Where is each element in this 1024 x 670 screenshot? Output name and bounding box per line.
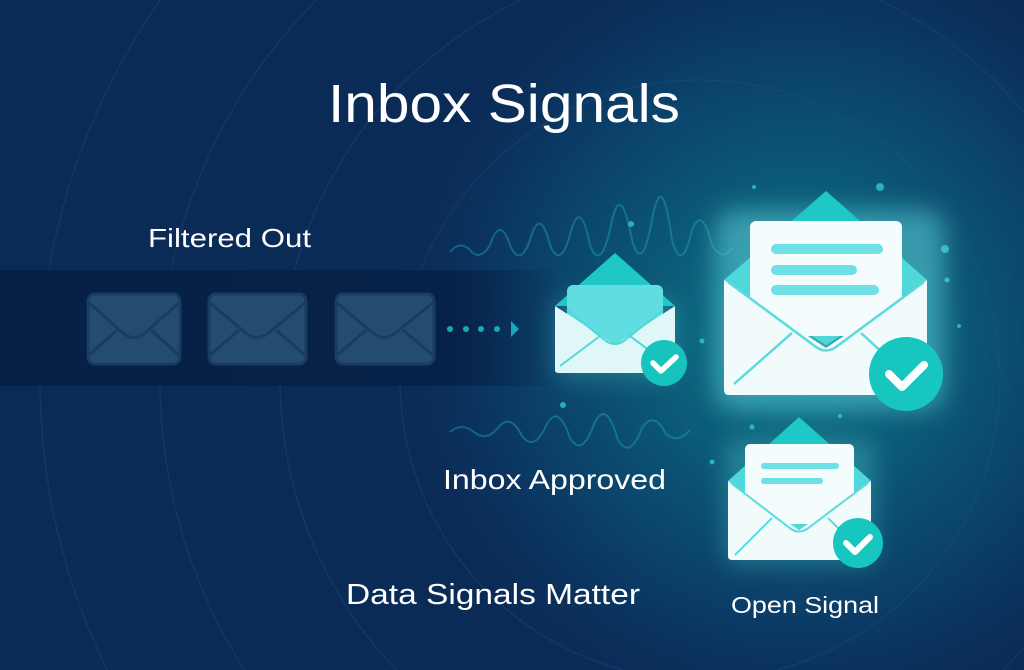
- small approved envelope: [555, 253, 687, 386]
- filtered envelopes: [88, 294, 434, 364]
- label: Filtered Out: Filtered Out: [148, 223, 312, 253]
- label: Data Signals Matter: Data Signals Matter: [346, 579, 640, 611]
- large approved envelope: [715, 191, 945, 411]
- arrow: dotted: [447, 321, 519, 337]
- waves: [450, 197, 732, 448]
- title: Inbox Signals: [328, 74, 680, 134]
- label: Inbox Approved: Inbox Approved: [443, 464, 666, 495]
- sparkle dots: [560, 183, 961, 464]
- filtered band: [0, 270, 560, 386]
- label: Open Signal: Open Signal: [731, 592, 879, 618]
- open signal envelope: [725, 417, 883, 568]
